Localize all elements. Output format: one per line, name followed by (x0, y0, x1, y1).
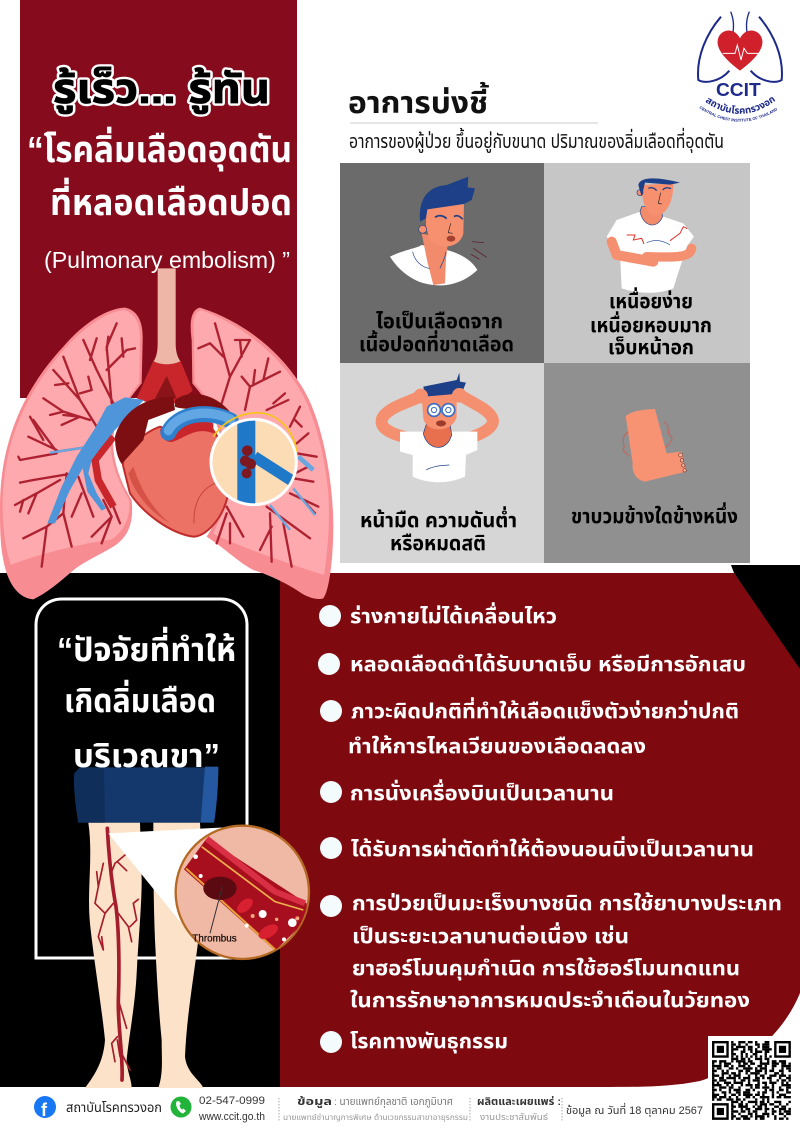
footer: contact (198, 1095, 265, 1123)
icon: facebook: f (41, 1100, 48, 1120)
thrombus magnifier (176, 826, 309, 959)
footer: data source: นายแพทย์ชำนาญการพิเศษ ด้านเวชกรรมสาขาอายุรกรรม (283, 1112, 468, 1122)
skirt (74, 767, 218, 823)
symptom card: fatigue chest pain: เหนื่อยหอบมาก (590, 311, 712, 337)
symptom card: coughing blood (340, 163, 544, 363)
logo: CCIT: CENTRAL CHEST INSTITUTE OF THAILAND (700, 106, 777, 122)
footer: publisher (477, 1095, 561, 1122)
icon: dizzy man (382, 373, 493, 482)
panel: title background (20, 0, 297, 398)
illustration: legs and thrombus (74, 767, 309, 1088)
label: thrombus: Thrombus (192, 933, 237, 944)
item: immobility (319, 602, 557, 628)
item: clotting abnormality: ภาวะผิดปกติที่ทำให้เลือดแข็งตัวง่ายกว่าปกติ (351, 697, 739, 723)
inset clot magnifier (211, 413, 297, 507)
footer: date: ข้อมูล ณ วันที่ 18 ตุลาคม 2567 (566, 1102, 703, 1117)
atrium (115, 397, 175, 464)
item: immobility: ร่างกายไม่ได้เคลื่อนไหว (350, 602, 557, 628)
logo: CCIT (697, 11, 783, 122)
item: clotting abnormality (320, 697, 739, 758)
symptom label: ขาบวมข้างใดข้างหนึ่ง (571, 502, 738, 528)
panel: symptom grid (340, 163, 750, 563)
symptom label: หน้ามืด ความดันต่ำ (360, 506, 517, 532)
title line 2: “โรคลิ่มเลือดอุดตัน (27, 126, 292, 171)
legs (85, 823, 142, 1088)
heading: causes in legs: เกิดลิ่มเลือด (64, 679, 216, 719)
icon: man with chest pain (607, 178, 694, 293)
list: risk factors (318, 602, 782, 1053)
qr code (708, 1036, 800, 1126)
pulmonary vessels (50, 447, 90, 453)
trachea (153, 268, 181, 365)
symptom label: เหนื่อยง่าย (609, 287, 693, 313)
footer: publisher: งานประชาสัมพันธ์ (480, 1112, 548, 1122)
illustration: lungs and heart (0, 268, 333, 599)
panel: black lower left (0, 573, 282, 1087)
footer: facebook name: สถาบันโรคทรวงอก (66, 1100, 162, 1115)
aortic vessel (168, 414, 231, 433)
icon: swollen leg (623, 409, 686, 482)
bronchi (137, 361, 193, 403)
symptom card: fatigue chest pain (544, 163, 750, 363)
title line 1: รู้เร็ว... รู้ทัน (53, 65, 270, 114)
heading: causes in legs (57, 626, 236, 774)
leg veins (95, 828, 138, 1080)
footer: data source (283, 1095, 468, 1122)
item: vein injury: หลอดเลือดดำได้รับบาดเจ็บ หรือมีการอักเสบ (350, 653, 746, 676)
item: cancer and medication: ยาฮอร์โมนคุมกำเนิด การใช้ฮอร์โมนทดแทน (352, 958, 740, 980)
footer: data source: ข้อมูล (297, 1095, 332, 1108)
item: genetics: โรคทางพันธุกรรม (350, 1031, 508, 1053)
footer: publisher: ผลิตและเผยแพร่ : (477, 1095, 561, 1108)
symptom card: dizziness (340, 363, 544, 563)
symptom card: coughing blood: เนื้อปอดที่ขาดเลือด (359, 330, 514, 356)
panel: risk factors background (280, 573, 800, 1087)
icon: phone (170, 1096, 192, 1118)
panel: black corner wedge (731, 565, 800, 672)
title line 4: (Pulmonary embolism) ” (44, 247, 290, 273)
item: clotting abnormality: ทำให้การไหลเวียนของเลือดลดลง (348, 736, 646, 758)
item: surgery: ได้รับการผ่าตัดทำให้ต้องนอนนิ่งเป็นเวลานาน (351, 836, 754, 861)
lung vessels (15, 323, 318, 567)
footer: contact: 02-547-0999 (199, 1095, 265, 1107)
right lung (191, 308, 333, 599)
title line 1 outline: รู้เร็ว... รู้ทัน (53, 65, 270, 114)
heading: symptoms (348, 81, 724, 154)
footer (34, 1095, 703, 1123)
left lung (0, 308, 143, 599)
callout box: causes heading frame (36, 599, 247, 958)
heading: causes in legs: บริเวณขา” (73, 737, 220, 774)
item: cancer and medication (320, 892, 782, 1012)
heart (123, 423, 229, 537)
symptom card: dizziness: หรือหมดสติ (390, 533, 486, 555)
item: long flights (320, 779, 614, 805)
symptom label: ไอเป็นเลือดจาก (376, 310, 503, 333)
icon: coughing man (390, 177, 487, 285)
heading: causes in legs: “ปัจจัยที่ทำให้ (57, 626, 236, 668)
icon: facebook (34, 1096, 56, 1120)
logo: CCIT: สถาบันโรคทรวงอก (706, 97, 776, 114)
item: long flights: การนั่งเครื่องบินเป็นเวลานาน (350, 779, 614, 805)
heading: symptoms: อาการบ่งชี้ (348, 81, 490, 120)
symptom card: leg swelling (544, 363, 750, 563)
zoom cone (108, 827, 225, 922)
logo: CCIT: CCIT (716, 79, 761, 100)
footer: contact: www.ccit.go.th (198, 1111, 265, 1123)
item: cancer and medication: เป็นระยะเวลานานต่อเนื่อง เช่น (352, 922, 629, 948)
symptom card: fatigue chest pain: เจ็บหน้าอก (608, 336, 694, 359)
item: cancer and medication: การป่วยเป็นมะเร็งบางชนิด การใช้ยาบางประเภท (352, 892, 782, 915)
item: cancer and medication: ในการรักษาอาการหมดประจำเดือนในวัยทอง (350, 990, 750, 1012)
footer: data source: : นายแพทย์กุลชาติ เอกภูมิบาศ (334, 1096, 453, 1108)
title (27, 65, 292, 273)
title line 3: ที่หลอดเลือดปอด (50, 177, 292, 223)
